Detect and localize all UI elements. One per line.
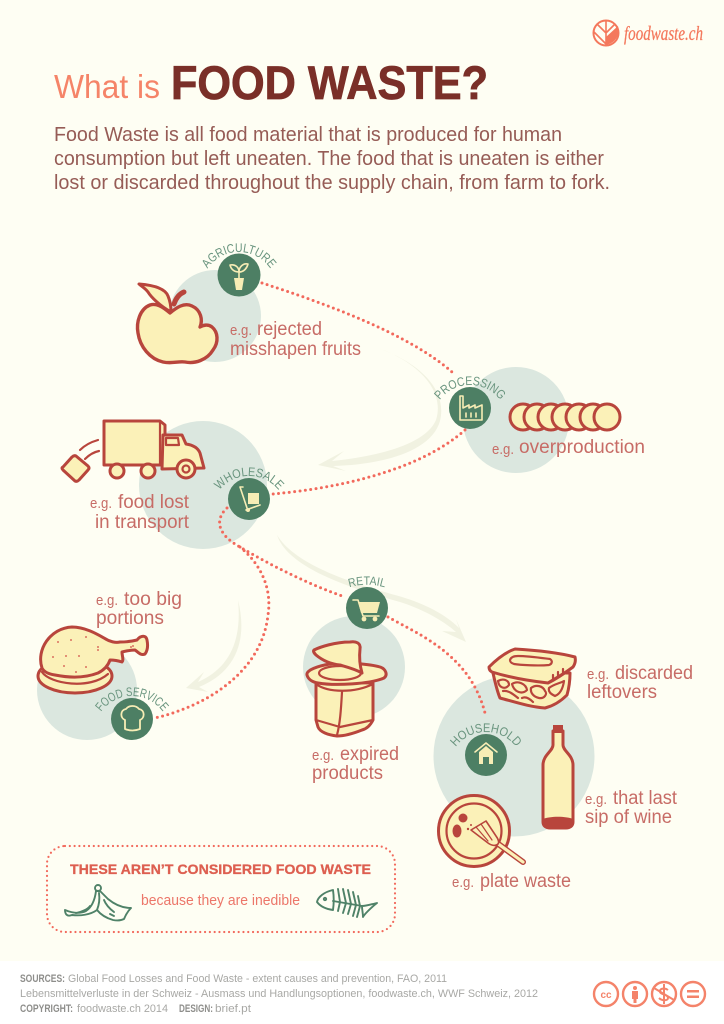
label: expired products: expired — [340, 744, 399, 765]
stage node: agriculture — [202, 243, 277, 296]
icon: plate and fork — [438, 796, 523, 866]
intro text — [54, 124, 610, 194]
label: overproduction: e.g. — [492, 441, 514, 458]
label: too big portions: portions — [96, 608, 164, 629]
callout heading: THESE AREN’T CONSIDERED FOOD WASTE — [70, 862, 371, 877]
icon: apple slices — [510, 404, 620, 430]
stage node: household: HOUSEHOLD — [450, 723, 521, 746]
label: expired products: products — [312, 763, 383, 784]
label: too big portions — [96, 589, 182, 629]
label: food lost in transport: in transport — [95, 512, 190, 533]
label: plate waste: plate waste — [480, 871, 571, 892]
title: What is — [54, 68, 160, 105]
label: discarded leftovers: discarded — [615, 663, 693, 684]
label: expired products: e.g. — [312, 747, 334, 764]
flow arrow: wholesale to household — [277, 535, 466, 642]
title — [54, 56, 488, 109]
icon: wine bottle — [543, 725, 573, 828]
label: food lost in transport: e.g. — [90, 495, 112, 512]
label: expired products — [312, 744, 399, 784]
stage node: retail — [346, 576, 388, 629]
panel: household — [434, 648, 693, 892]
stage node: wholesale: WHOLESALE — [213, 467, 284, 490]
footer: sources and credits: foodwaste.ch 2014 — [77, 1003, 168, 1015]
label: that last sip of wine: that last — [613, 788, 678, 809]
label: rejected misshapen fruits: misshapen fruits — [230, 339, 361, 360]
stage node: retail: RETAIL — [348, 576, 385, 588]
panel: food service — [36, 589, 182, 740]
icons: creative commons licence — [594, 982, 705, 1006]
label: rejected misshapen fruits: e.g. — [230, 322, 252, 339]
stage node: wholesale — [213, 467, 284, 520]
footer: sources and credits: DESIGN: — [179, 1003, 213, 1015]
footer: sources and credits: SOURCES: — [20, 973, 65, 985]
panel: wholesale — [60, 420, 284, 549]
icons: creative commons licence: cc — [600, 990, 612, 1001]
label: discarded leftovers: e.g. — [587, 666, 609, 683]
icon: fish bone — [317, 889, 377, 917]
footer band — [0, 961, 724, 1024]
icon: banana peel — [65, 885, 131, 920]
label: food lost in transport: food lost — [118, 492, 190, 513]
dotted supply chain path — [155, 283, 485, 718]
intro text: lost or discarded throughout the supply chain, from farm to fork. — [54, 172, 610, 194]
stage node: processing — [434, 376, 505, 429]
label: discarded leftovers — [587, 663, 693, 703]
panel: agriculture — [136, 243, 361, 364]
icon: truck — [62, 421, 204, 481]
icon: leftovers container — [489, 649, 575, 708]
panel: retail — [303, 576, 405, 784]
label: that last sip of wine: sip of wine — [585, 807, 672, 828]
callout text: because they are inedible — [141, 893, 300, 909]
label: rejected misshapen fruits — [230, 319, 361, 360]
footer: sources and credits: Global Food Losses and Food Waste - extent causes and prevention, FAO, 2011 — [68, 973, 447, 985]
callout: not considered food waste — [47, 846, 395, 932]
label: too big portions: too big — [124, 589, 182, 610]
logo: foodwaste.ch — [594, 20, 703, 46]
icon: yoghurt pot — [307, 642, 386, 736]
stage node: agriculture: AGRICULTURE — [202, 243, 277, 268]
panel: processing — [434, 367, 645, 473]
label: discarded leftovers: leftovers — [587, 682, 657, 703]
flow arrow: wholesale to food service — [186, 600, 241, 692]
intro text: Food Waste is all food material that is produced for human — [54, 124, 562, 146]
title: FOOD WASTE? — [171, 56, 488, 109]
footer: sources and credits: brief.pt — [215, 1003, 251, 1015]
label: too big portions: e.g. — [96, 592, 118, 609]
footer: sources and credits: Lebensmittelverluste in der Schweiz - Ausmass und Handlungsoptionen, foodwaste.ch, WWF Schweiz, 2012 — [20, 988, 538, 1000]
stage node: processing: PROCESSING — [434, 376, 505, 400]
footer: sources and credits: COPYRIGHT: — [20, 1003, 73, 1015]
icon: roast chicken — [38, 627, 148, 693]
icon: apple — [138, 284, 217, 363]
label: that last sip of wine — [585, 788, 678, 828]
label: food lost in transport — [90, 492, 190, 533]
label: that last sip of wine: e.g. — [585, 791, 607, 808]
stage node: food service: FOOD SERVICE — [95, 687, 170, 712]
stage node: household — [450, 723, 521, 776]
stage node: food service — [95, 687, 170, 740]
label: overproduction: overproduction — [519, 437, 645, 458]
label: rejected misshapen fruits: rejected — [257, 319, 322, 340]
intro text: consumption but left uneaten. The food that is uneaten is either — [54, 148, 604, 170]
footer: sources and credits — [20, 973, 538, 1015]
flow arrow: processing to wholesale — [318, 347, 441, 471]
label: plate waste: e.g. — [452, 874, 474, 891]
